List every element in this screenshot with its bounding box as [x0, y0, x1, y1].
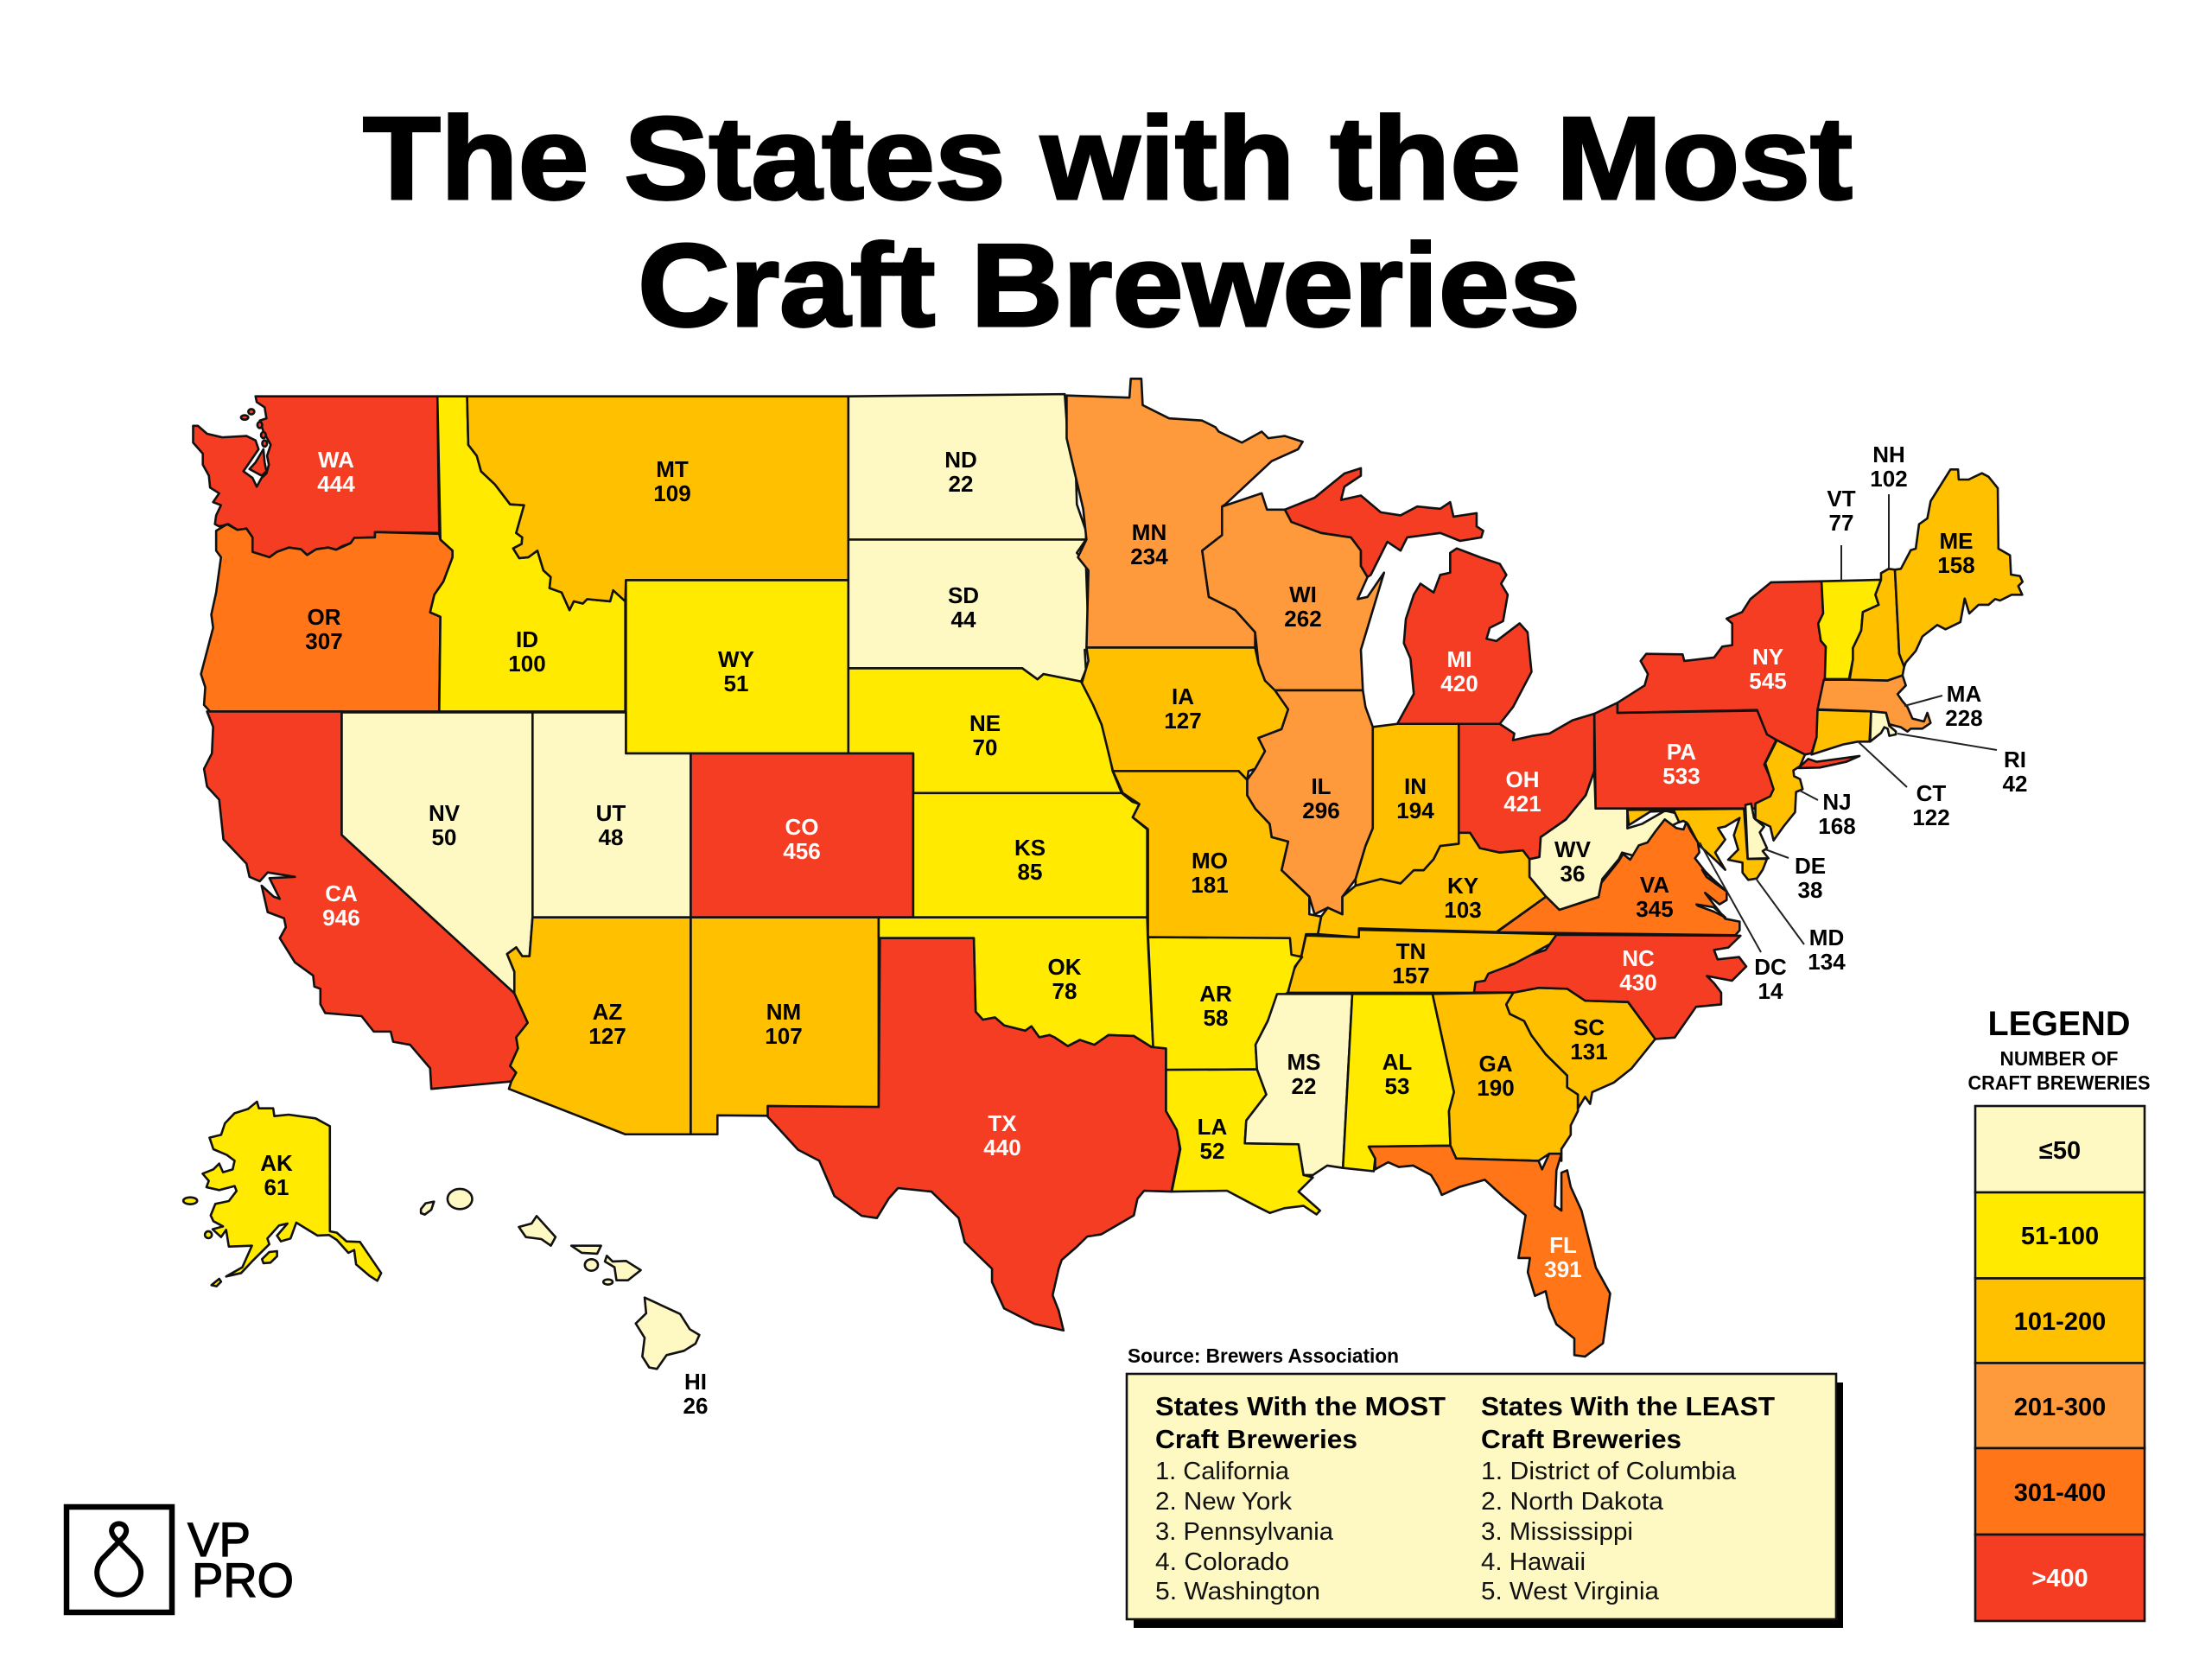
state: Alabama	[1343, 994, 1454, 1172]
state: North Dakota: ND	[944, 447, 977, 473]
state: Oklahoma: OK	[1047, 954, 1082, 980]
state: Washington: WA	[318, 447, 354, 473]
state: Oregon: 307	[305, 628, 343, 654]
state: Tennessee: 157	[1392, 963, 1430, 988]
state: North Carolina: 430	[1619, 969, 1657, 995]
state: Mississippi	[1245, 994, 1352, 1175]
state: Missouri	[1113, 771, 1321, 957]
state: Hawaii	[421, 1189, 708, 1419]
state: Colorado	[690, 753, 913, 918]
list: least breweries: 5. West Virginia	[1481, 1578, 1660, 1605]
state: Connecticut	[1812, 710, 1950, 830]
state: Indiana	[1356, 724, 1459, 886]
state: New Mexico: 107	[765, 1023, 803, 1049]
state: Georgia: 190	[1477, 1075, 1515, 1101]
state: Nevada	[341, 712, 532, 994]
state: Mississippi: 22	[1292, 1073, 1316, 1099]
state: Alabama: 53	[1385, 1073, 1409, 1099]
state: Wyoming	[626, 580, 849, 753]
state: Utah: UT	[596, 800, 626, 826]
state: Texas: TX	[988, 1110, 1017, 1136]
legend scale: ≤50	[2039, 1137, 2081, 1165]
state: Kansas: KS	[1014, 835, 1046, 861]
state: Nebraska: 70	[973, 734, 997, 760]
state: North Dakota: 22	[949, 471, 973, 497]
list: most breweries: Craft Breweries	[1155, 1424, 1357, 1454]
state: Nebraska	[849, 668, 1122, 793]
list: most breweries: States With the MOST	[1155, 1391, 1446, 1421]
state: North Carolina: NC	[1622, 945, 1655, 971]
state: Utah	[532, 712, 690, 918]
state: Louisiana: LA	[1198, 1114, 1228, 1140]
state: Florida: FL	[1549, 1232, 1577, 1258]
state: Ohio: 421	[1503, 791, 1541, 817]
state: South Carolina: SC	[1573, 1014, 1605, 1040]
state: South Carolina	[1506, 988, 1656, 1109]
state: Georgia	[1433, 993, 1578, 1160]
state: South Dakota	[849, 539, 1089, 682]
state: Louisiana: 52	[1200, 1138, 1224, 1164]
state: Wisconsin: WI	[1289, 582, 1317, 607]
state: West Virginia: WV	[1554, 836, 1592, 862]
state: Illinois: IL	[1311, 773, 1332, 799]
state: Kansas: 85	[1018, 859, 1042, 885]
state: California: 946	[322, 905, 360, 931]
state: Arkansas	[1148, 938, 1302, 1070]
state: Arizona	[507, 918, 690, 1135]
state: Maine	[1895, 469, 2023, 667]
state: Vermont: 77	[1829, 510, 1853, 536]
state: Kentucky	[1318, 833, 1546, 938]
state: Minnesota: MN	[1132, 519, 1166, 545]
state: South Dakota: SD	[948, 582, 979, 608]
legend heading: NUMBER OF	[1999, 1047, 2119, 1070]
legend scale: 301-400	[2014, 1479, 2106, 1507]
state: Iowa: IA	[1172, 683, 1194, 709]
state: Pennsylvania: PA	[1667, 739, 1696, 765]
state: Alabama: AL	[1382, 1049, 1412, 1075]
state: Montana: MT	[656, 456, 689, 482]
state: Massachusetts: MA	[1947, 681, 1981, 707]
state: Indiana: 194	[1396, 798, 1434, 823]
legend scale: 201-300	[2014, 1394, 2106, 1421]
state: Utah: 48	[599, 824, 623, 850]
legend scale: 51-100	[2021, 1223, 2099, 1250]
state: Idaho: ID	[516, 626, 538, 652]
district: Washington DC: 14	[1758, 978, 1783, 1004]
state: Vermont: VT	[1827, 486, 1856, 512]
list: most breweries: 5. Washington	[1155, 1578, 1320, 1605]
title: Craft Breweries	[638, 219, 1580, 351]
state: Massachusetts: 228	[1945, 705, 1983, 731]
state: Delaware: 38	[1798, 877, 1822, 903]
panel: rankings	[1127, 1374, 1843, 1628]
state: Louisiana	[1166, 1070, 1320, 1214]
state: Indiana: IN	[1404, 773, 1427, 799]
state: Wyoming: 51	[724, 671, 748, 696]
state: Texas	[768, 938, 1180, 1331]
state: Massachusetts	[1817, 676, 1983, 732]
state: New Hampshire	[1850, 442, 1908, 681]
state: Wisconsin: 262	[1284, 606, 1322, 632]
title: The States with the Most	[363, 92, 1853, 224]
state: Maine: ME	[1939, 528, 1974, 554]
state: New York: 545	[1749, 668, 1787, 694]
list: least breweries: 2. North Dakota	[1481, 1488, 1664, 1516]
state: South Carolina: 131	[1570, 1039, 1608, 1065]
state: New Jersey: 168	[1818, 813, 1856, 839]
state: Washington	[193, 397, 439, 557]
state: Wisconsin	[1202, 493, 1384, 690]
state: Montana: 109	[653, 480, 691, 506]
state: Alaska: 61	[264, 1174, 289, 1200]
state: Missouri: MO	[1192, 848, 1228, 874]
state: New York	[1618, 582, 1859, 768]
state: Kentucky: 103	[1444, 897, 1482, 923]
state: New Jersey: NJ	[1822, 789, 1852, 815]
state: Rhode Island: RI	[2004, 747, 2026, 772]
state: Michigan: 420	[1440, 671, 1478, 696]
state: Arkansas: AR	[1199, 981, 1232, 1007]
state: Tennessee: TN	[1396, 938, 1426, 964]
state: Vermont	[1818, 486, 1881, 679]
state: Washington: 444	[317, 471, 355, 497]
state: Tennessee	[1288, 930, 1557, 993]
state: Arkansas: 58	[1204, 1005, 1228, 1031]
state: Wyoming: WY	[718, 646, 754, 672]
state: Michigan: MI	[1447, 646, 1471, 672]
state: Rhode Island: 42	[2003, 771, 2027, 797]
state: California	[204, 711, 528, 1089]
state: Georgia: GA	[1479, 1051, 1513, 1077]
state: Minnesota: 234	[1130, 543, 1168, 569]
district: Washington DC	[1700, 842, 1787, 1004]
legend heading: CRAFT BREWERIES	[1968, 1071, 2150, 1094]
state: Maryland	[1627, 809, 1846, 975]
title	[363, 92, 1853, 351]
state: Idaho: 100	[508, 651, 546, 677]
state: Colorado: 456	[783, 838, 821, 864]
state: Virginia: 345	[1636, 896, 1674, 922]
legend scale	[1975, 1106, 2145, 1621]
state: Montana	[467, 397, 849, 610]
state: Hawaii: HI	[684, 1369, 707, 1395]
state: Michigan	[1285, 468, 1531, 724]
list: least breweries: Craft Breweries	[1481, 1424, 1681, 1454]
state: New Mexico	[690, 918, 879, 1135]
state: Nevada: NV	[429, 800, 461, 826]
state: Mississippi: MS	[1287, 1049, 1320, 1075]
state: Illinois: 296	[1302, 798, 1340, 823]
state: Nebraska: NE	[969, 710, 1001, 736]
state: Oklahoma	[879, 918, 1154, 1047]
state: Iowa: 127	[1164, 708, 1202, 734]
state: Alaska: AK	[260, 1150, 293, 1176]
state: Maine: 158	[1937, 552, 1975, 578]
state: Arizona: 127	[588, 1023, 626, 1049]
list: most breweries	[1155, 1391, 1446, 1605]
state: Rhode Island	[1870, 711, 2027, 797]
state: Iowa	[1082, 647, 1288, 780]
list: most breweries: 2. New York	[1155, 1488, 1293, 1516]
logo: VP PRO: VP	[188, 1512, 251, 1567]
legend scale: >400	[2031, 1565, 2088, 1592]
state: South Dakota: 44	[951, 607, 976, 632]
state: Nevada: 50	[432, 824, 456, 850]
state: Oklahoma: 78	[1052, 978, 1077, 1004]
state: Kentucky: KY	[1447, 873, 1478, 899]
state: North Carolina	[1474, 935, 1746, 1039]
state: Alaska	[183, 1102, 381, 1287]
list: most breweries: 1. California	[1155, 1458, 1290, 1485]
state: West Virginia	[1529, 771, 1681, 910]
state: New Hampshire: 102	[1870, 466, 1908, 492]
list: least breweries: 1. District of Columbia	[1481, 1458, 1737, 1485]
state: North Dakota	[849, 394, 1086, 539]
state: New York: NY	[1752, 644, 1783, 670]
state: California: CA	[325, 880, 358, 906]
state: Colorado: CO	[785, 814, 819, 840]
state: Virginia: VA	[1640, 872, 1669, 898]
state: Delaware: DE	[1795, 853, 1826, 879]
logo: VP PRO	[67, 1507, 294, 1612]
state: Oregon: OR	[308, 604, 341, 630]
state: Pennsylvania	[1594, 702, 1777, 809]
state: Virginia	[1497, 819, 1739, 935]
state: Illinois	[1247, 690, 1373, 914]
state: Arizona: AZ	[593, 999, 622, 1025]
state: Texas: 440	[983, 1135, 1021, 1160]
state: Ohio: OH	[1505, 766, 1540, 792]
list: least breweries: 3. Mississippi	[1481, 1518, 1633, 1546]
list: most breweries: 3. Pennsylvania	[1155, 1518, 1334, 1546]
state: Maryland: 134	[1808, 949, 1846, 975]
state: Minnesota	[1066, 378, 1303, 647]
state: Missouri: 181	[1191, 872, 1229, 898]
state: Connecticut: CT	[1916, 780, 1946, 806]
state: Hawaii: 26	[683, 1393, 708, 1419]
state: Oregon	[201, 524, 453, 711]
legend heading: LEGEND	[1987, 1005, 2131, 1043]
state: Connecticut: 122	[1912, 804, 1950, 830]
district: Washington DC: DC	[1754, 954, 1787, 980]
state: Maryland: MD	[1809, 925, 1844, 950]
state: New Mexico: NM	[766, 999, 801, 1025]
state: West Virginia: 36	[1560, 861, 1585, 887]
list: most breweries: 4. Colorado	[1155, 1548, 1289, 1576]
state: Ohio	[1459, 714, 1594, 859]
state: Kansas	[913, 793, 1147, 918]
state: New Jersey	[1756, 741, 1856, 841]
list: least breweries	[1481, 1391, 1775, 1605]
legend scale: 101-200	[2014, 1308, 2106, 1336]
state: Pennsylvania: 533	[1662, 763, 1700, 789]
state: Florida: 391	[1544, 1256, 1582, 1282]
logo: VP PRO: PRO	[192, 1553, 294, 1607]
state: New Hampshire: NH	[1872, 442, 1905, 467]
list: least breweries: 4. Hawaii	[1481, 1548, 1586, 1576]
state: Florida	[1369, 1146, 1610, 1357]
source note: Source: Brewers Association	[1128, 1344, 1399, 1367]
legend heading	[1968, 1005, 2150, 1094]
state: Delaware	[1745, 804, 1826, 903]
state: Idaho	[430, 397, 626, 711]
list: least breweries: States With the LEAST	[1481, 1391, 1775, 1421]
